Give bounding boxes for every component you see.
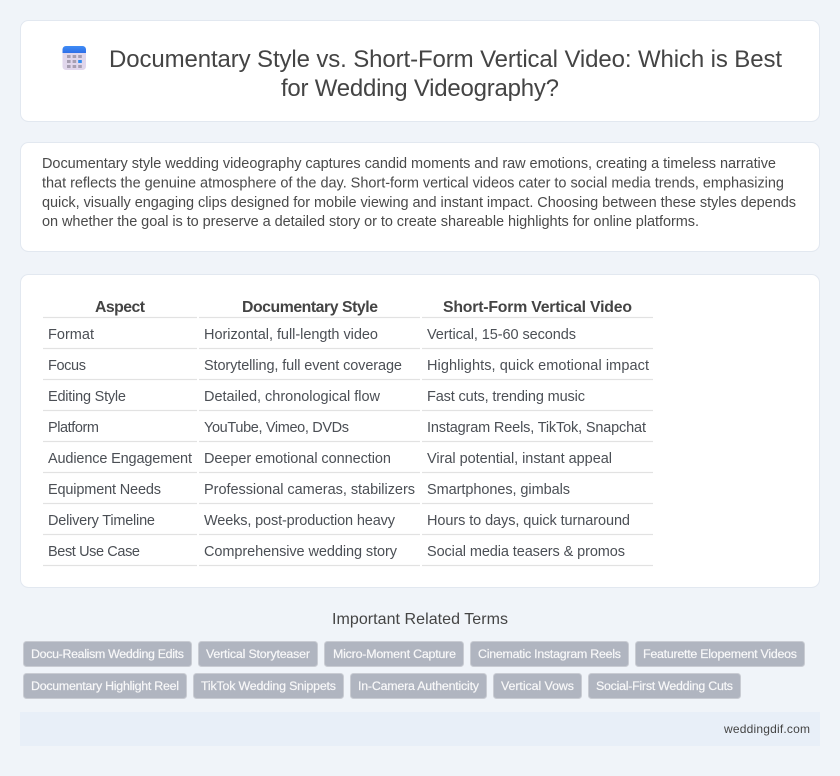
footer xyxy=(20,712,820,746)
tags: related terms xyxy=(24,642,804,698)
text block: introduction: Documentary style wedding videography captures candid moments and raw emotions, creating a timeless narrative xyxy=(42,156,776,172)
tag: Micro-Moment Capture xyxy=(333,647,456,661)
panel: comparison table xyxy=(20,274,820,588)
text block: introduction: on whether the goal is to preserve a detailed story or to create shareable highlights for online platforms. xyxy=(42,214,699,230)
table row: delivery timeline xyxy=(48,513,630,529)
tag: In-Camera Authenticity xyxy=(358,679,480,693)
table row: editing style xyxy=(48,389,585,405)
tag xyxy=(24,642,192,666)
table row: focus: Highlights, quick emotional impact xyxy=(427,358,649,374)
title: Documentary Style vs. Short-Form Vertical Video: Which is Best xyxy=(109,46,782,73)
table row: platform: Instagram Reels, TikTok, Snapchat xyxy=(427,420,646,436)
tag: Cinematic Instagram Reels xyxy=(478,647,621,661)
title xyxy=(109,46,782,102)
table row: focus xyxy=(48,358,649,374)
table row: equipment needs xyxy=(48,482,570,498)
table row: focus: Storytelling, full event coverage xyxy=(204,358,402,374)
tag: Social-First Wedding Cuts xyxy=(596,679,733,693)
tag: Vertical Vows xyxy=(501,679,574,693)
table row: delivery timeline: Weeks, post-production heavy xyxy=(204,513,396,529)
tag: Docu-Realism Wedding Edits xyxy=(31,647,184,661)
table row: editing style: Detailed, chronological flow xyxy=(204,389,381,405)
table header: Short-Form Vertical Video xyxy=(443,299,632,316)
tag xyxy=(350,674,486,698)
tag xyxy=(198,642,318,666)
icon: calendar xyxy=(62,46,86,70)
tag xyxy=(470,642,628,666)
table row: format: Format xyxy=(48,327,94,343)
tag: Documentary Highlight Reel xyxy=(31,679,179,693)
table row: format: Horizontal, full-length video xyxy=(204,327,378,343)
table row: equipment needs: Equipment Needs xyxy=(48,482,161,498)
tag xyxy=(324,642,464,666)
tag: TikTok Wedding Snippets xyxy=(201,679,336,693)
title: for Wedding Videography? xyxy=(281,75,559,102)
text block: introduction xyxy=(42,156,796,230)
table row: delivery timeline: Hours to days, quick turnaround xyxy=(427,513,630,529)
table row: format: Vertical, 15-60 seconds xyxy=(427,327,576,343)
table row: editing style: Fast cuts, trending music xyxy=(427,389,585,405)
table row: platform: YouTube, Vimeo, DVDs xyxy=(204,420,349,436)
panel: title header xyxy=(20,20,820,122)
table row: equipment needs: Smartphones, gimbals xyxy=(427,482,570,498)
table row: editing style: Editing Style xyxy=(48,389,126,405)
table row: format xyxy=(48,327,576,343)
heading: related terms: Important Related Terms xyxy=(332,611,508,628)
table row: best use case: Best Use Case xyxy=(48,544,140,560)
table row: platform: Platform xyxy=(48,420,99,436)
tag xyxy=(194,674,344,698)
tag: Featurette Elopement Videos xyxy=(643,647,797,661)
table header xyxy=(95,299,632,316)
tag xyxy=(636,642,804,666)
text block: introduction: that reflects the genuine atmosphere of the day. Short-form vertical videos cater to social media trends, emphasizing xyxy=(42,176,784,192)
tag xyxy=(494,674,582,698)
tag xyxy=(24,674,186,698)
table row: best use case: Social media teasers & promos xyxy=(427,544,625,560)
table row: focus: Focus xyxy=(48,358,86,374)
text block: introduction: quick, visually engaging clips designed for mobile viewing and instant impact. Choosing between these styles depends xyxy=(42,195,796,211)
panel: introduction xyxy=(20,142,820,252)
table row: platform xyxy=(48,420,646,436)
tag xyxy=(588,674,740,698)
table row: audience engagement: Audience Engagement xyxy=(48,451,192,467)
table header: Documentary Style xyxy=(242,299,378,316)
table row: audience engagement: Viral potential, instant appeal xyxy=(427,451,612,467)
table header: Aspect xyxy=(95,299,146,316)
table row: best use case xyxy=(48,544,625,560)
table row: equipment needs: Professional cameras, stabilizers xyxy=(204,482,415,498)
table row: audience engagement: Deeper emotional connection xyxy=(204,451,391,467)
table row: delivery timeline: Delivery Timeline xyxy=(48,513,155,529)
table row: audience engagement xyxy=(48,451,612,467)
tag: Vertical Storyteaser xyxy=(206,647,310,661)
footer: weddingdif.com xyxy=(723,722,810,736)
table row: best use case: Comprehensive wedding story xyxy=(204,544,398,560)
